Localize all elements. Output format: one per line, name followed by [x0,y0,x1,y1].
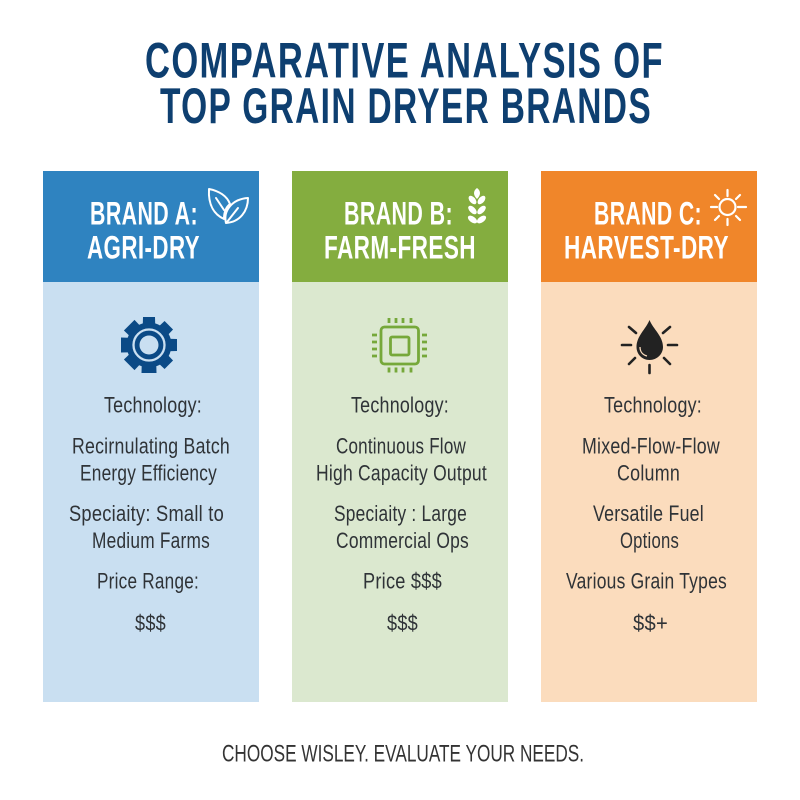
Brand A details [69,393,230,636]
panel C header [541,171,757,282]
Brand C details: Various Grain Types [566,569,727,594]
Brand B details: Commercial Ops [336,528,469,553]
Brand A details: Speciaity: Small to [69,501,224,526]
Brand C details: Technology: [604,393,702,418]
panel A body [43,282,259,702]
Brand B details [316,393,487,636]
panel C body [541,282,757,702]
Brand B details: $$$ [387,611,418,636]
Brand B details: High Capacity Output [316,461,487,486]
icon: sun [711,190,746,225]
Brand B details: Technology: [351,393,449,418]
icon: wheat [466,188,488,225]
Brand B details: Continuous Flow [336,434,466,459]
Brand A details: $$$ [135,611,166,636]
Brand A details: Energy Efficiency [80,461,217,486]
icon: gear [121,317,177,373]
Brand B heading [324,196,476,266]
panel B body [292,282,508,702]
footer text: CHOOSE WISLEY. EVALUATE YOUR NEEDS. [222,740,584,768]
Brand A heading: BRAND A: [90,196,198,232]
Brand B details: Price $$$ [363,569,442,594]
Brand A heading: AGRI-DRY [87,230,200,266]
Brand B heading: BRAND B: [344,196,453,232]
panel A header [43,171,259,282]
panel: Brand B [292,171,508,702]
Brand A details: Recirnulating Batch [72,434,230,459]
title [145,32,664,134]
icon: leaves [209,189,248,223]
Brand C heading [564,196,729,266]
Brand C details: Mixed-Flow-Flow [582,434,720,459]
icon: water drop with rays [622,320,677,373]
Brand A heading [87,196,200,266]
panel: Brand C [541,171,757,702]
Brand B heading: FARM-FRESH [324,230,476,266]
Brand C heading: BRAND C: [594,196,702,232]
Brand C details: Options [620,528,679,553]
Brand C heading: HARVEST-DRY [564,230,729,266]
Brand C details: Column [617,461,680,486]
Brand C details: $$+ [633,611,668,636]
Brand B details: Speciaity : Large [334,501,467,526]
icon: chip [372,318,427,372]
Brand A details: Technology: [104,393,202,418]
panel: Brand A [43,171,259,702]
Brand A details: Price Range: [97,569,199,594]
panel B header [292,171,508,282]
Brand C details: Versatile Fuel [593,501,704,526]
Brand C details [566,393,727,636]
Brand A details: Medium Farms [92,528,210,553]
